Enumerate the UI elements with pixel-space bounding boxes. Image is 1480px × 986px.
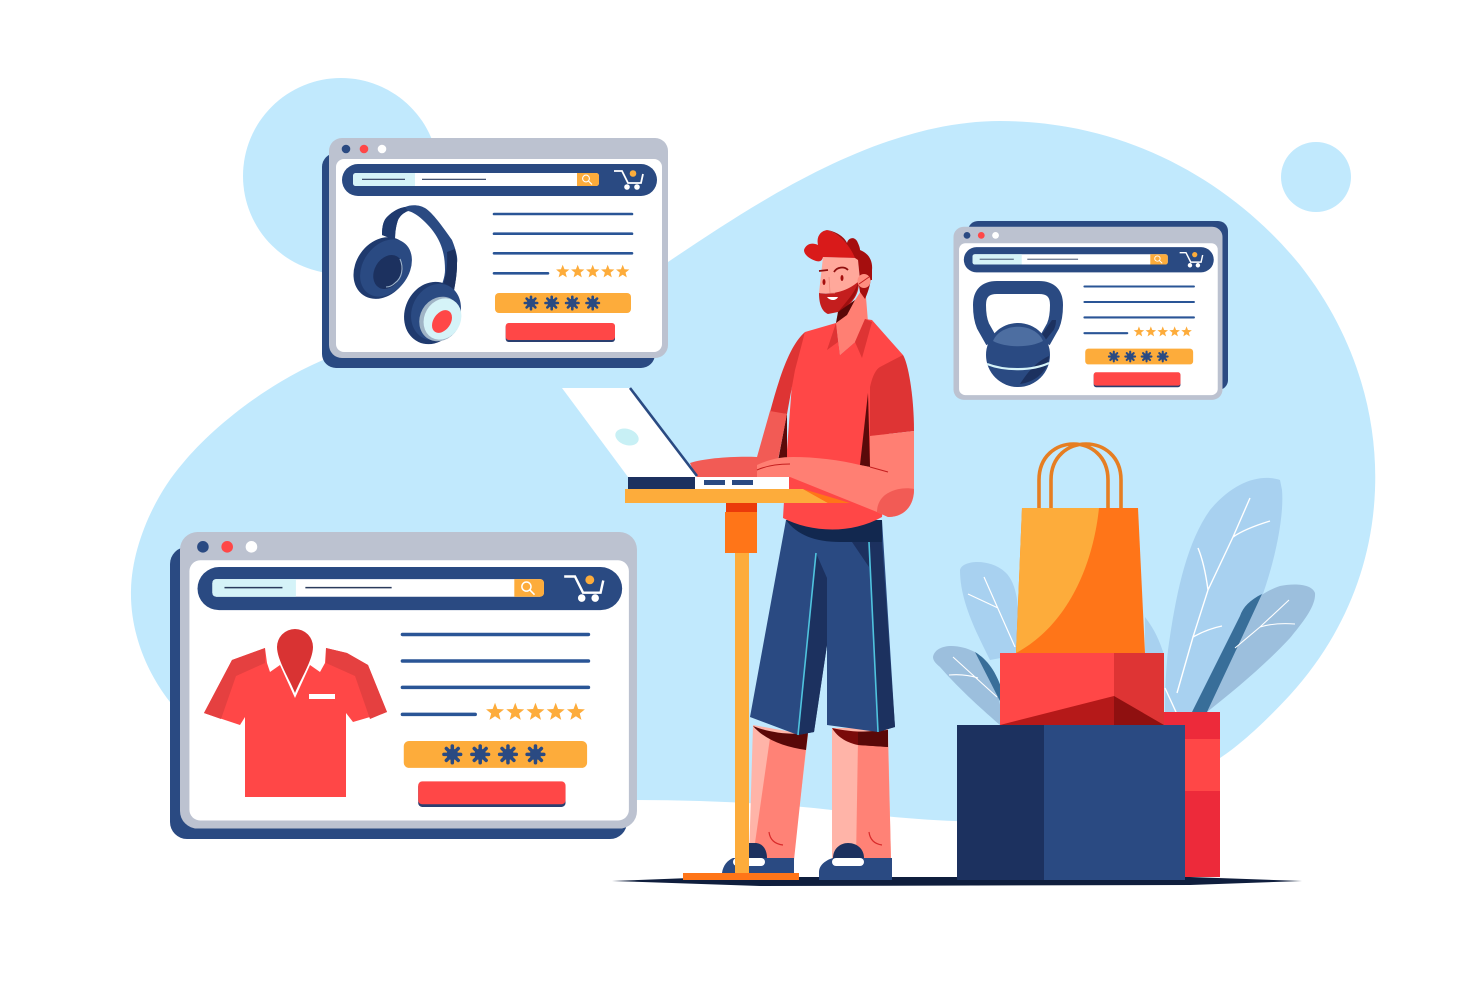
eye left	[822, 279, 826, 285]
plants	[933, 478, 1315, 725]
right shoe	[819, 843, 892, 880]
left leg	[749, 725, 808, 860]
red box: top	[1000, 653, 1164, 725]
leaf: left back	[960, 562, 1019, 660]
leaf: centre sliver	[1145, 617, 1164, 655]
standing table	[625, 489, 850, 880]
browser window: headphones	[322, 138, 668, 368]
browser window: kettlebell	[954, 221, 1228, 400]
icon: headphones	[342, 205, 470, 353]
leaf: large back	[1165, 478, 1282, 712]
head	[804, 230, 872, 323]
ground shadow	[612, 877, 1302, 886]
right leg	[832, 728, 891, 860]
eye right	[840, 275, 844, 281]
neck	[836, 285, 868, 355]
person	[690, 230, 914, 880]
leaf: right	[1192, 584, 1315, 712]
face	[819, 257, 860, 293]
hair behind ear	[858, 278, 871, 299]
red box: back	[1160, 712, 1220, 877]
left shoe	[722, 843, 794, 873]
hair: dark	[827, 230, 872, 280]
beard	[819, 280, 860, 314]
navy box: bottom	[957, 725, 1185, 880]
mouth	[827, 297, 838, 300]
icon: red polo shirt	[204, 629, 387, 797]
shorts	[750, 520, 895, 735]
leaf: left low	[933, 646, 1002, 725]
shopping bag	[1016, 444, 1145, 653]
neck shadow	[836, 300, 855, 323]
right sleeve	[860, 355, 914, 467]
icon: kettlebell	[980, 288, 1056, 387]
background blobs	[131, 78, 1375, 822]
right forearm	[757, 431, 914, 517]
hair: bright	[804, 230, 856, 261]
nose	[829, 277, 835, 293]
laptop	[562, 388, 789, 489]
shirt	[783, 319, 903, 530]
ear crease	[859, 277, 869, 284]
left arm and sleeve	[690, 332, 805, 480]
ear	[858, 274, 870, 288]
beard shade	[838, 283, 858, 312]
browser window: polo shirt	[170, 532, 637, 839]
eyebrows	[819, 268, 848, 272]
